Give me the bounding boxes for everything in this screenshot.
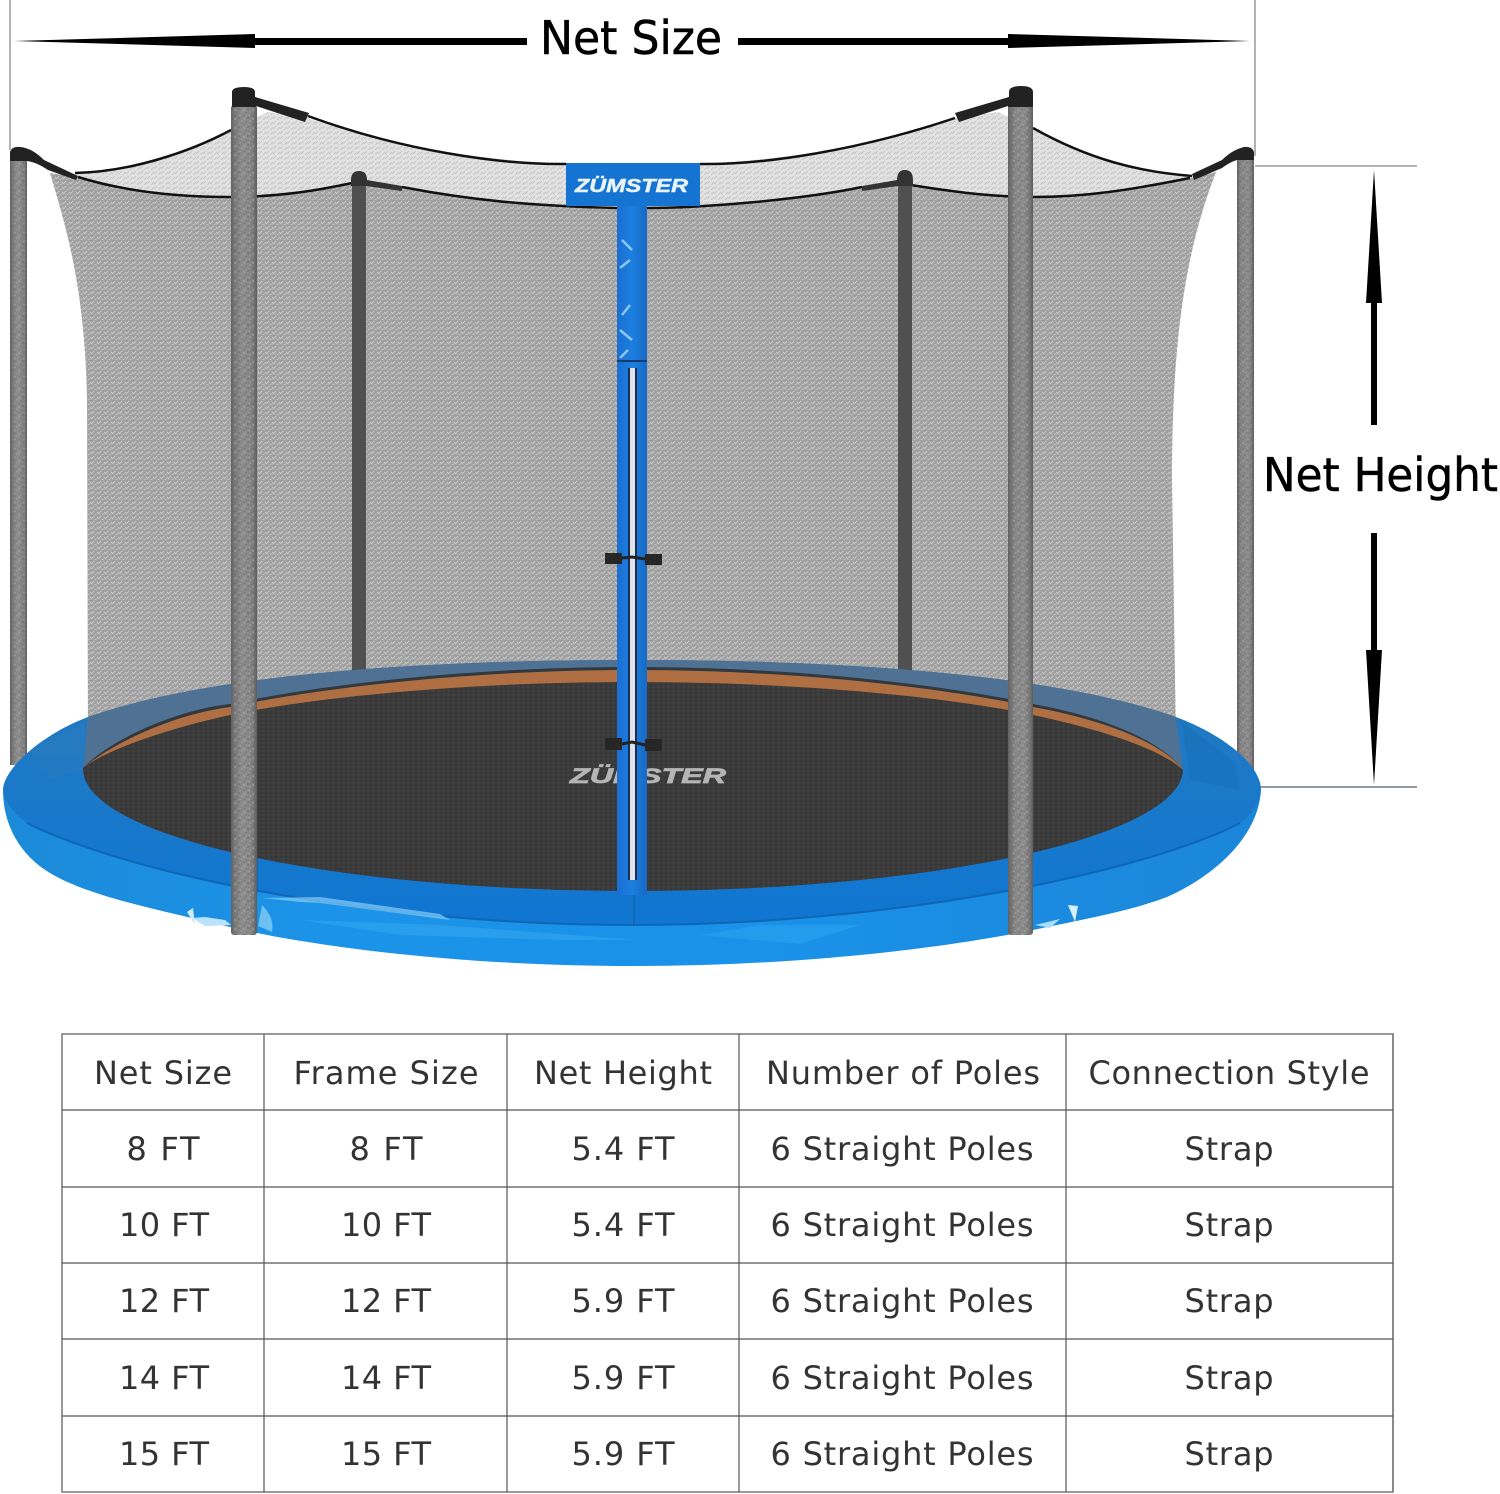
table header row: Net Size bbox=[94, 1054, 232, 1092]
row: 15 FT: 6 Straight Poles bbox=[770, 1435, 1034, 1473]
row: 14 FT: 14 FT bbox=[119, 1359, 209, 1397]
row: 14 FT: 14 FT bbox=[341, 1359, 431, 1397]
top brand banner bbox=[566, 163, 700, 206]
pole caps and arms bbox=[10, 86, 1254, 180]
row: 8 FT: 8 FT bbox=[126, 1130, 200, 1168]
row: 15 FT: 15 FT bbox=[341, 1435, 431, 1473]
row: 15 FT: 5.9 FT bbox=[572, 1435, 675, 1473]
door zipper strip bbox=[617, 205, 647, 895]
row: 10 FT: 10 FT bbox=[119, 1206, 209, 1244]
door buckles bbox=[605, 553, 662, 751]
mat shadow edge bbox=[83, 667, 1183, 770]
table header row: Frame Size bbox=[294, 1054, 478, 1092]
row: 14 FT bbox=[119, 1359, 1274, 1397]
net size arrow left bbox=[14, 34, 527, 48]
net rim lines bbox=[75, 116, 1192, 208]
dimension guide lines bbox=[10, 0, 1417, 787]
pad seams and highlights bbox=[27, 722, 1240, 944]
table header row: Number of Poles bbox=[766, 1054, 1040, 1092]
row: 10 FT bbox=[119, 1206, 1274, 1244]
spec table bbox=[62, 1034, 1393, 1492]
row: 15 FT bbox=[119, 1435, 1274, 1473]
row: 14 FT: 5.9 FT bbox=[572, 1359, 675, 1397]
row: 15 FT: 15 FT bbox=[119, 1435, 209, 1473]
table header row: Net Height bbox=[534, 1054, 712, 1092]
enclosure net body bbox=[50, 172, 1216, 740]
orange mat ring bbox=[83, 670, 1183, 770]
row: 10 FT: 10 FT bbox=[341, 1206, 431, 1244]
row: 12 FT bbox=[119, 1282, 1274, 1320]
row: 8 FT: 8 FT bbox=[350, 1130, 423, 1168]
row: 12 FT: 6 Straight Poles bbox=[770, 1282, 1034, 1320]
mat logo: ZÜMSTER bbox=[568, 765, 727, 788]
top brand banner: ZÜMSTER bbox=[574, 176, 688, 196]
row: 12 FT: 12 FT bbox=[341, 1282, 431, 1320]
row: 10 FT: 6 Straight Poles bbox=[770, 1206, 1034, 1244]
row: 14 FT: 6 Straight Poles bbox=[770, 1359, 1034, 1397]
net height arrow top bbox=[1366, 170, 1382, 425]
row: 12 FT: 12 FT bbox=[119, 1282, 209, 1320]
trampoline illustration bbox=[3, 86, 1261, 966]
upper light net bbox=[75, 112, 1192, 215]
heading: net size: Net Size bbox=[540, 11, 722, 65]
row: 8 FT bbox=[126, 1130, 1274, 1168]
far poles bbox=[10, 155, 1254, 770]
row: 15 FT: Strap bbox=[1184, 1435, 1274, 1473]
pad section behind net bbox=[83, 660, 1183, 770]
row: 8 FT: 5.4 FT bbox=[572, 1130, 675, 1168]
jumping mat bbox=[83, 682, 1183, 891]
pad side band bbox=[3, 790, 1261, 966]
row: 10 FT: 5.4 FT bbox=[572, 1206, 675, 1244]
table header row bbox=[94, 1054, 1370, 1092]
row: 12 FT: Strap bbox=[1184, 1282, 1274, 1320]
table grid bbox=[62, 1034, 1393, 1492]
row: 8 FT: 6 Straight Poles bbox=[770, 1130, 1034, 1168]
net height arrow bottom bbox=[1366, 533, 1382, 785]
back poles bbox=[351, 170, 913, 675]
row: 8 FT: Strap bbox=[1184, 1130, 1274, 1168]
row: 12 FT: 5.9 FT bbox=[572, 1282, 675, 1320]
front poles bbox=[231, 105, 1033, 935]
net size arrow right bbox=[738, 34, 1250, 48]
row: 14 FT: Strap bbox=[1184, 1359, 1274, 1397]
table header row: Connection Style bbox=[1088, 1054, 1370, 1092]
pad top surface bbox=[3, 660, 1261, 925]
row: 10 FT: Strap bbox=[1184, 1206, 1274, 1244]
